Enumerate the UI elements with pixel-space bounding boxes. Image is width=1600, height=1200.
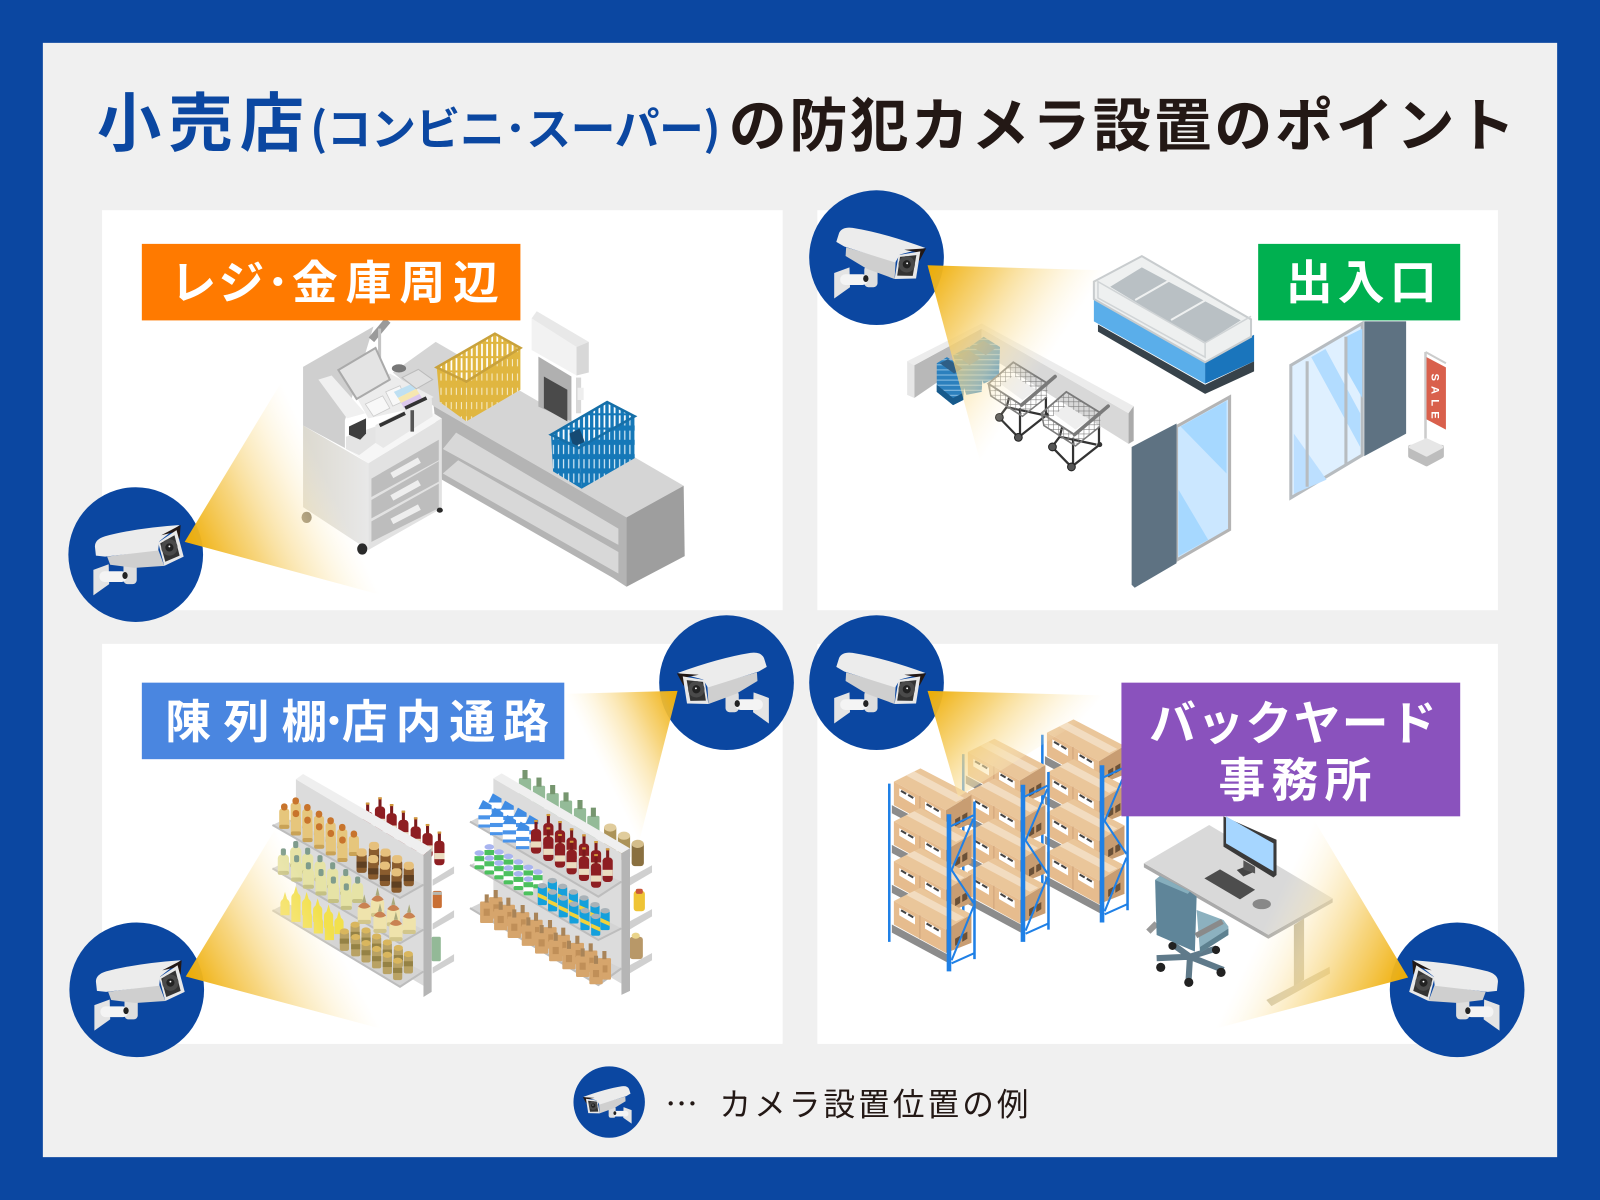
- title: blue part: [97, 71, 720, 165]
- illustration: card terminal: [532, 311, 589, 421]
- camera view cone left: [928, 691, 1121, 797]
- label: register and safe: [142, 244, 520, 320]
- panel background: [102, 210, 783, 610]
- illustration: shelf unit right: [470, 773, 652, 995]
- illustration: sale flag: [1410, 352, 1446, 464]
- panel background: [817, 644, 1498, 1044]
- illustration: items behind left shelf: [363, 797, 433, 858]
- illustration: door left: [1132, 397, 1230, 588]
- camera icon: [809, 190, 944, 325]
- icon: yellow basket: [437, 334, 520, 421]
- illustration: items behind right shelf: [519, 770, 644, 866]
- label: shelves and aisle: ･: [322, 686, 345, 752]
- label: backyard and office: バックヤード: [1149, 686, 1437, 754]
- label: entrance: 出入口: [1286, 245, 1437, 313]
- icon: blue basket: [551, 402, 635, 489]
- illustration: low wall: [907, 323, 1134, 444]
- camera view cone right: [564, 691, 678, 843]
- label: backyard and office: [1121, 683, 1460, 816]
- legend: カメラ設置位置の例: [719, 1079, 1029, 1125]
- illustration: shopping carts: [988, 362, 1108, 471]
- illustration: monitor and keyboard: [1204, 816, 1277, 909]
- title: [97, 71, 1515, 165]
- camera icon right: [1390, 922, 1524, 1057]
- panel background: [817, 210, 1498, 610]
- camera view cone right: [1215, 820, 1408, 1029]
- camera icon left: [69, 922, 204, 1057]
- label: register and safe: 金庫周辺: [292, 247, 499, 313]
- label: register and safe: ･: [266, 247, 289, 313]
- illustration: freezer case: [1094, 256, 1254, 394]
- camera view cone: [928, 265, 1107, 463]
- title: dark part: の防犯カメラ設置のポイント: [729, 79, 1515, 163]
- illustration: office chair: [1148, 876, 1228, 987]
- legend: [573, 1066, 1029, 1138]
- camera view cone: [185, 382, 381, 595]
- label: shelves and aisle: [142, 683, 564, 759]
- illustration: storage racks: [889, 719, 1128, 971]
- title: blue part: (コンビニ･スーパー): [310, 93, 720, 158]
- panel: backyard and office: [809, 615, 1524, 1057]
- panel: shelves and aisle: [69, 615, 794, 1057]
- illustration: shelf unit left: [272, 774, 454, 997]
- camera view cone left: [186, 829, 381, 1029]
- panel: register and safe: [68, 210, 783, 622]
- camera icon left: [809, 615, 944, 750]
- label: register and safe: レジ: [170, 247, 264, 313]
- panel background: [102, 644, 783, 1044]
- illustration: cash register: [302, 320, 443, 555]
- camera icon right: [659, 615, 794, 750]
- illustration: door right: [1291, 321, 1406, 498]
- illustration: desk: [1144, 825, 1333, 1006]
- illustration: sale flag: SALE: [1429, 373, 1441, 424]
- camera icon: [68, 487, 203, 622]
- label: shelves and aisle: 店内通路: [342, 686, 549, 752]
- illustration: checkout counter: [393, 342, 685, 587]
- label: entrance: [1258, 244, 1460, 320]
- illustration: basket stack: [937, 337, 1000, 405]
- label: shelves and aisle: 陳列棚: [165, 686, 328, 752]
- legend text: …: [665, 1078, 698, 1125]
- legend camera icon: [573, 1066, 645, 1138]
- title: blue part: 小売店: [97, 71, 304, 165]
- label: backyard and office: 事務所: [1218, 743, 1371, 811]
- panel: entrance: [809, 190, 1498, 610]
